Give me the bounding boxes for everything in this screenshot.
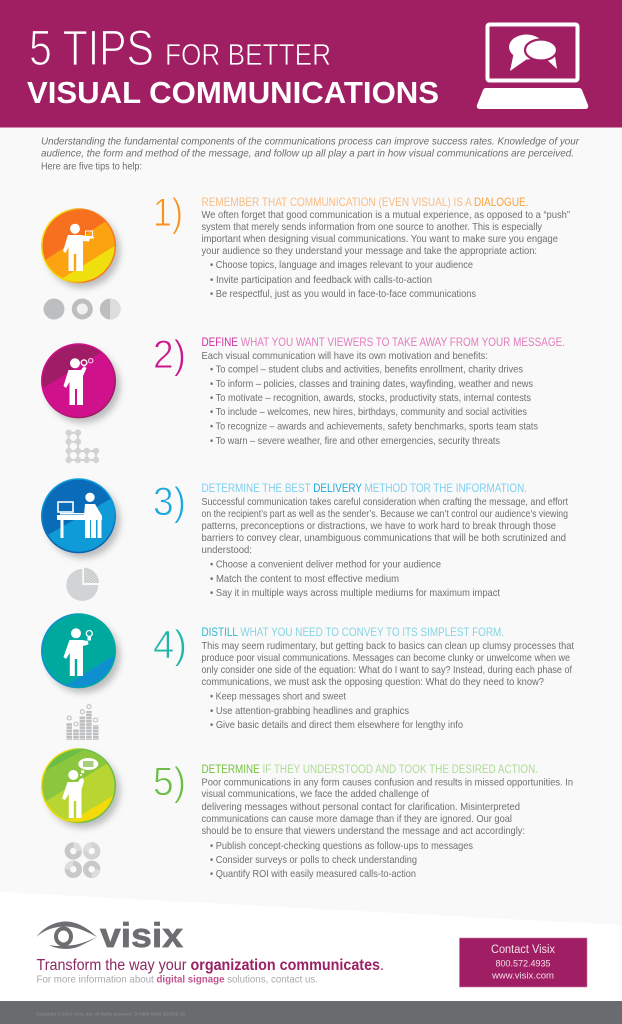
tip 3 body: Successful communication takes careful consideration when crafting the message, and effort bbox=[202, 497, 568, 508]
tip 1 body: • Choose topics, language and images relevant to your audience bbox=[210, 260, 473, 271]
tip 3 bbox=[153, 480, 568, 599]
tip 1 body: important when designing visual communications. You want to make sure you engage bbox=[202, 234, 558, 245]
icon: blue badge with person at desk bbox=[40, 478, 124, 562]
tip 4 body: produce poor visual communications. Messages can become clunky or unwelcome when we bbox=[202, 653, 570, 664]
icon: magenta badge with person and gears bbox=[40, 343, 124, 426]
tip 1 body: • Be respectful, just as you would in face-to-face communications bbox=[210, 289, 476, 300]
tip 1 body bbox=[202, 210, 571, 300]
contact box: 800.572.4935 bbox=[496, 958, 550, 970]
tip 5 body: should be to ensure that viewers understand the message and act accordingly: bbox=[202, 826, 525, 837]
tip 4 body bbox=[202, 641, 574, 731]
tip 5 body: • Publish concept-checking questions as follow-ups to messages bbox=[210, 841, 473, 852]
number 2: 2) bbox=[153, 333, 186, 377]
icon: equalizer bars bbox=[66, 705, 98, 740]
tip 3 body: • Match the content to most effective medium bbox=[210, 574, 399, 585]
number 1: 1) bbox=[153, 191, 183, 235]
intro text bbox=[41, 136, 580, 172]
tip 1 body: • Invite participation and feedback with calls-to-action bbox=[210, 275, 432, 286]
tip 2 body: • To compel – student clubs and activities, benefits enrollment, charity drives bbox=[210, 364, 523, 376]
tip 3 body: patterns, preconceptions or distractions, we have to work hard to break through those bbox=[202, 521, 556, 532]
tip 4 body: • Give basic details and direct them elsewhere for lengthy info bbox=[210, 720, 463, 731]
footer bar bbox=[0, 1001, 622, 1024]
icon: four discs bbox=[65, 842, 100, 878]
tip 5 body: • Quantify ROI with easily measured calls-to-action bbox=[210, 869, 416, 880]
logo: visix: visix bbox=[100, 917, 183, 955]
tip 2 body: • To include – welcomes, new hires, birthdays, community and social activities bbox=[210, 407, 527, 418]
title bbox=[27, 20, 439, 110]
title: FOR BETTER bbox=[165, 37, 331, 72]
tip 4 body: • Keep messages short and sweet bbox=[210, 692, 346, 702]
title: VISUAL COMMUNICATIONS bbox=[27, 76, 439, 110]
tip 5 body bbox=[202, 778, 573, 880]
icon: laptop with speech bubbles bbox=[477, 24, 588, 109]
header banner bbox=[0, 0, 622, 128]
footer white panel bbox=[0, 892, 622, 1001]
tip 2 heading: DEFINE WHAT YOU WANT VIEWERS TO TAKE AWAY FROM YOUR MESSAGE. bbox=[202, 336, 565, 349]
title: 5 TIPS bbox=[29, 20, 154, 76]
tip 3 body: understood: bbox=[202, 545, 252, 556]
tip 5 body: visual communications, we face the added challenge of bbox=[202, 789, 429, 800]
tip 2 bbox=[153, 333, 565, 447]
tip 2 body: • To motivate – recognition, awards, stocks, productivity stats, internal contests bbox=[210, 393, 531, 404]
tip 5 bbox=[153, 760, 573, 880]
icon: pie chart bbox=[66, 568, 99, 601]
icon: teal badge with person and light bulb bbox=[40, 610, 125, 700]
tip 3 body: on the recipient’s part as well as the sender’s. Because we can’t control our audience’s viewing bbox=[202, 509, 568, 520]
tip 1 body: your audience so they understand your message and take the appropriate action: bbox=[202, 246, 537, 257]
tip 5 body: Poor communications in any form causes confusion and results in missed opportunities. In bbox=[202, 778, 573, 788]
intro text: Here are five tips to help: bbox=[41, 162, 142, 172]
contact box: Contact Visix bbox=[491, 944, 555, 956]
tip 1 bbox=[153, 191, 571, 300]
tip 2 body bbox=[202, 351, 538, 447]
contact box: www.visix.com bbox=[491, 970, 554, 982]
tip 1 heading: REMEMBER THAT COMMUNICATION (EVEN VISUAL) IS A DIALOGUE. bbox=[202, 196, 528, 209]
tagline: Transform the way your organization communicates. bbox=[36, 957, 384, 974]
intro text: audience, the form and method of the message, and follow up all play a part in how visual communications are perceived. bbox=[41, 148, 574, 160]
number 5: 5) bbox=[153, 760, 186, 804]
tip 1 body: We often forget that good communication is a mutual experience, as opposed to a “push” bbox=[202, 210, 571, 221]
tip 4 body: This may seem rudimentary, but getting back to basics can clean up clumsy processes that bbox=[202, 641, 574, 652]
tip 3 body: • Choose a convenient deliver method for your audience bbox=[210, 560, 441, 570]
tip 4 bbox=[153, 623, 574, 731]
tip 2 body: • To warn – severe weather, fire and other emergencies, security threats bbox=[210, 436, 500, 447]
tip 4 body: • Use attention-grabbing headlines and graphics bbox=[210, 706, 409, 717]
number 3: 3) bbox=[153, 480, 186, 524]
tip 5 body: delivering messages without personal contact for clarification. Misinterpreted bbox=[202, 802, 520, 813]
tip 5 heading: DETERMINE IF THEY UNDERSTOOD AND TOOK THE DESIRED ACTION. bbox=[202, 763, 538, 776]
tip 5 body: communications can cause more damage than if they are ignored. Our goal bbox=[202, 814, 512, 825]
number 4: 4) bbox=[153, 623, 187, 667]
icon: orange badge with person and laptop bbox=[40, 208, 124, 292]
tip 2 body: • To recognize – awards and achievements, safety benchmarks, sports team stats bbox=[210, 422, 538, 432]
tip 1 body: system that merely sends information from one source to another. This is especially bbox=[202, 222, 543, 233]
icon: green badge with person and thought bubble bbox=[40, 748, 124, 832]
tip 3 body: barriers to convey clear, unambiguous communications that will be both scrutinized and bbox=[202, 533, 566, 544]
copyright: Copyright © 2014 Visix, Inc. All rights reserved. D-0899-0900-160505-15 bbox=[36, 1012, 186, 1016]
tip 4 body: communications, we must ask the opposing question: What do they need to know? bbox=[202, 677, 544, 688]
contact box bbox=[460, 938, 587, 987]
tip 3 body bbox=[202, 497, 568, 599]
tip 3 heading: DETERMINE THE BEST DELIVERY METHOD TOR THE INFORMATION. bbox=[202, 482, 527, 495]
tip 2 body: • To inform – policies, classes and training dates, wayfinding, weather and news bbox=[210, 379, 533, 390]
contact line: For more information about digital signage solutions, contact us. bbox=[36, 974, 318, 986]
tip 3 body: • Say it in multiple ways across multiple mediums for maximum impact bbox=[210, 588, 500, 599]
icon: grey circles bbox=[44, 298, 121, 320]
tip 2 body: Each visual communication will have its own motivation and benefits: bbox=[202, 351, 488, 362]
tip 5 body: • Consider surveys or polls to check understanding bbox=[210, 855, 417, 866]
tip 4 heading: DISTILL WHAT YOU NEED TO CONVEY TO ITS SIMPLEST FORM. bbox=[202, 626, 504, 639]
logo: visix bbox=[36, 917, 183, 955]
intro text: Understanding the fundamental components of the communications process can improve success rates. Knowledge of your bbox=[41, 136, 580, 148]
icon: dotted grid bbox=[66, 430, 99, 463]
tip 4 body: only consider one side of the equation: What do I want to say? Instead, during each phase of bbox=[202, 665, 572, 676]
